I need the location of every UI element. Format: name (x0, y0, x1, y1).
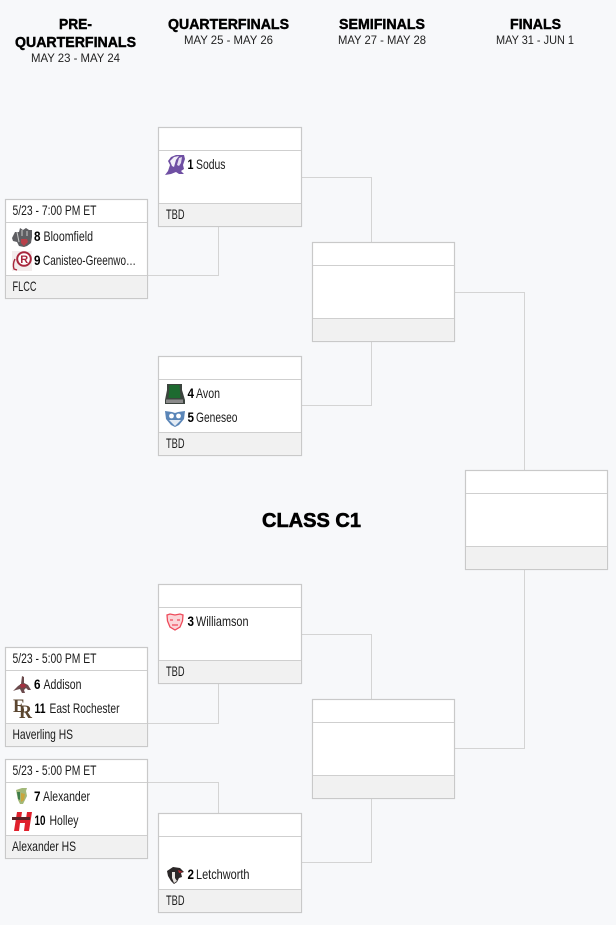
team: 3 Williamson: 3 (188, 613, 194, 629)
venue: TBD (166, 206, 184, 222)
team: 9 Canisteo-Greenwood: Canisteo-Greenwo… (43, 252, 136, 268)
match card: pre-quarterfinal Bloomfield vs Canisteo-Greenwood (6, 200, 148, 298)
team: 10 Holley: 10 (34, 812, 46, 828)
match card: quarterfinal Williamson (158, 584, 302, 684)
column heading: quarterfinals (168, 16, 289, 47)
venue: TBD (166, 663, 184, 679)
team: 6 Addison (34, 676, 82, 692)
venue: Haverling HS (12, 726, 73, 742)
match card: quarterfinal Sodus (158, 128, 302, 226)
team: 5 Geneseo: Geneseo (196, 409, 238, 425)
team: 1 Sodus (188, 156, 226, 172)
column heading: quarterfinals: MAY 25 - MAY 26 (184, 33, 273, 47)
team: 8 Bloomfield: Bloomfield (44, 228, 93, 244)
team: 5 Geneseo (188, 409, 238, 425)
venue: Alexander HS (12, 838, 76, 854)
icon: Holley logo (12, 812, 32, 831)
icon: Bloomfield logo (12, 228, 32, 247)
connector lines (148, 178, 524, 862)
date and time: 5/23 - 5:00 PM ET (12, 762, 97, 778)
match card: quarterfinal Letchworth (158, 814, 302, 912)
team: 9 Canisteo-Greenwood: 9 (34, 252, 41, 268)
team: 4 Avon: Avon (196, 385, 220, 401)
bracket title: class c1: CLASS C1 (262, 510, 361, 532)
venue: FLCC (12, 278, 36, 294)
icon: East Rochester logo (13, 696, 32, 723)
team: 5 Geneseo: 5 (188, 409, 194, 425)
team: 2 Letchworth: 2 (188, 866, 194, 882)
match card: pre-quarterfinal Alexander vs Holley (6, 760, 148, 858)
icon: East Rochester logo: R (19, 702, 32, 723)
team: 3 Williamson: Williamson (196, 613, 248, 629)
icon: Canisteo-Greenwood logo (12, 251, 32, 271)
column heading: pre-quarterfinals (15, 16, 136, 65)
icon: East Rochester logo: E (13, 696, 25, 717)
column heading: finals (496, 16, 574, 47)
match card: semifinal top (312, 242, 454, 342)
column heading: semifinals (338, 16, 426, 47)
match card: finals (466, 470, 608, 570)
team: 3 Williamson (188, 613, 248, 629)
team: 2 Letchworth: Letchworth (196, 866, 250, 882)
column heading: finals: MAY 31 - JUN 1 (496, 33, 574, 47)
column heading: pre-quarterfinals: MAY 23 - MAY 24 (31, 51, 120, 65)
match card: pre-quarterfinal Addison vs East Rochester (6, 648, 148, 746)
team: 7 Alexander: 7 (34, 788, 41, 804)
team: 11 East Rochester: East Rochester (50, 700, 120, 716)
team: 4 Avon: 4 (188, 385, 194, 401)
icon: Geneseo logo (165, 411, 185, 427)
icon: Williamson logo (167, 614, 183, 630)
team: 1 Sodus: 1 (188, 156, 194, 172)
icon: Alexander logo (16, 788, 27, 804)
team: 10 Holley: Holley (50, 812, 78, 828)
team: 8 Bloomfield: 8 (34, 228, 41, 244)
icon: Letchworth logo (167, 867, 184, 884)
team: 8 Bloomfield (34, 228, 93, 244)
match card: semifinal bottom (312, 700, 454, 798)
icon: Canisteo-Greenwood logo: R (20, 254, 28, 266)
venue: TBD (166, 435, 184, 451)
team: 11 East Rochester: 11 (34, 700, 46, 716)
team: 6 Addison: Addison (44, 676, 82, 692)
column heading: finals: FINALS (510, 16, 561, 33)
icon: Sodus logo (165, 155, 185, 175)
venue: TBD (166, 892, 184, 908)
column heading: semifinals: SEMIFINALS (339, 16, 425, 33)
icon: Avon logo (165, 384, 185, 404)
team: 1 Sodus: Sodus (196, 156, 226, 172)
team: 2 Letchworth (188, 866, 250, 882)
icon: Addison logo (13, 676, 31, 693)
date and time: 5/23 - 7:00 PM ET (12, 202, 97, 218)
column heading: pre-quarterfinals: QUARTERFINALS (15, 34, 136, 51)
team: 6 Addison: 6 (34, 676, 41, 692)
team: 10 Holley (34, 812, 78, 828)
team: 4 Avon (188, 385, 220, 401)
column heading: quarterfinals: QUARTERFINALS (168, 16, 289, 33)
column heading: semifinals: MAY 27 - MAY 28 (338, 33, 426, 47)
team: 7 Alexander (34, 788, 90, 804)
team: 11 East Rochester (34, 700, 120, 716)
column heading: pre-quarterfinals: PRE- (59, 16, 92, 33)
team: 9 Canisteo-Greenwood (34, 252, 136, 268)
team: 7 Alexander: Alexander (43, 788, 90, 804)
date and time: 5/23 - 5:00 PM ET (12, 650, 97, 666)
match card: quarterfinal Avon vs Geneseo (158, 356, 302, 456)
